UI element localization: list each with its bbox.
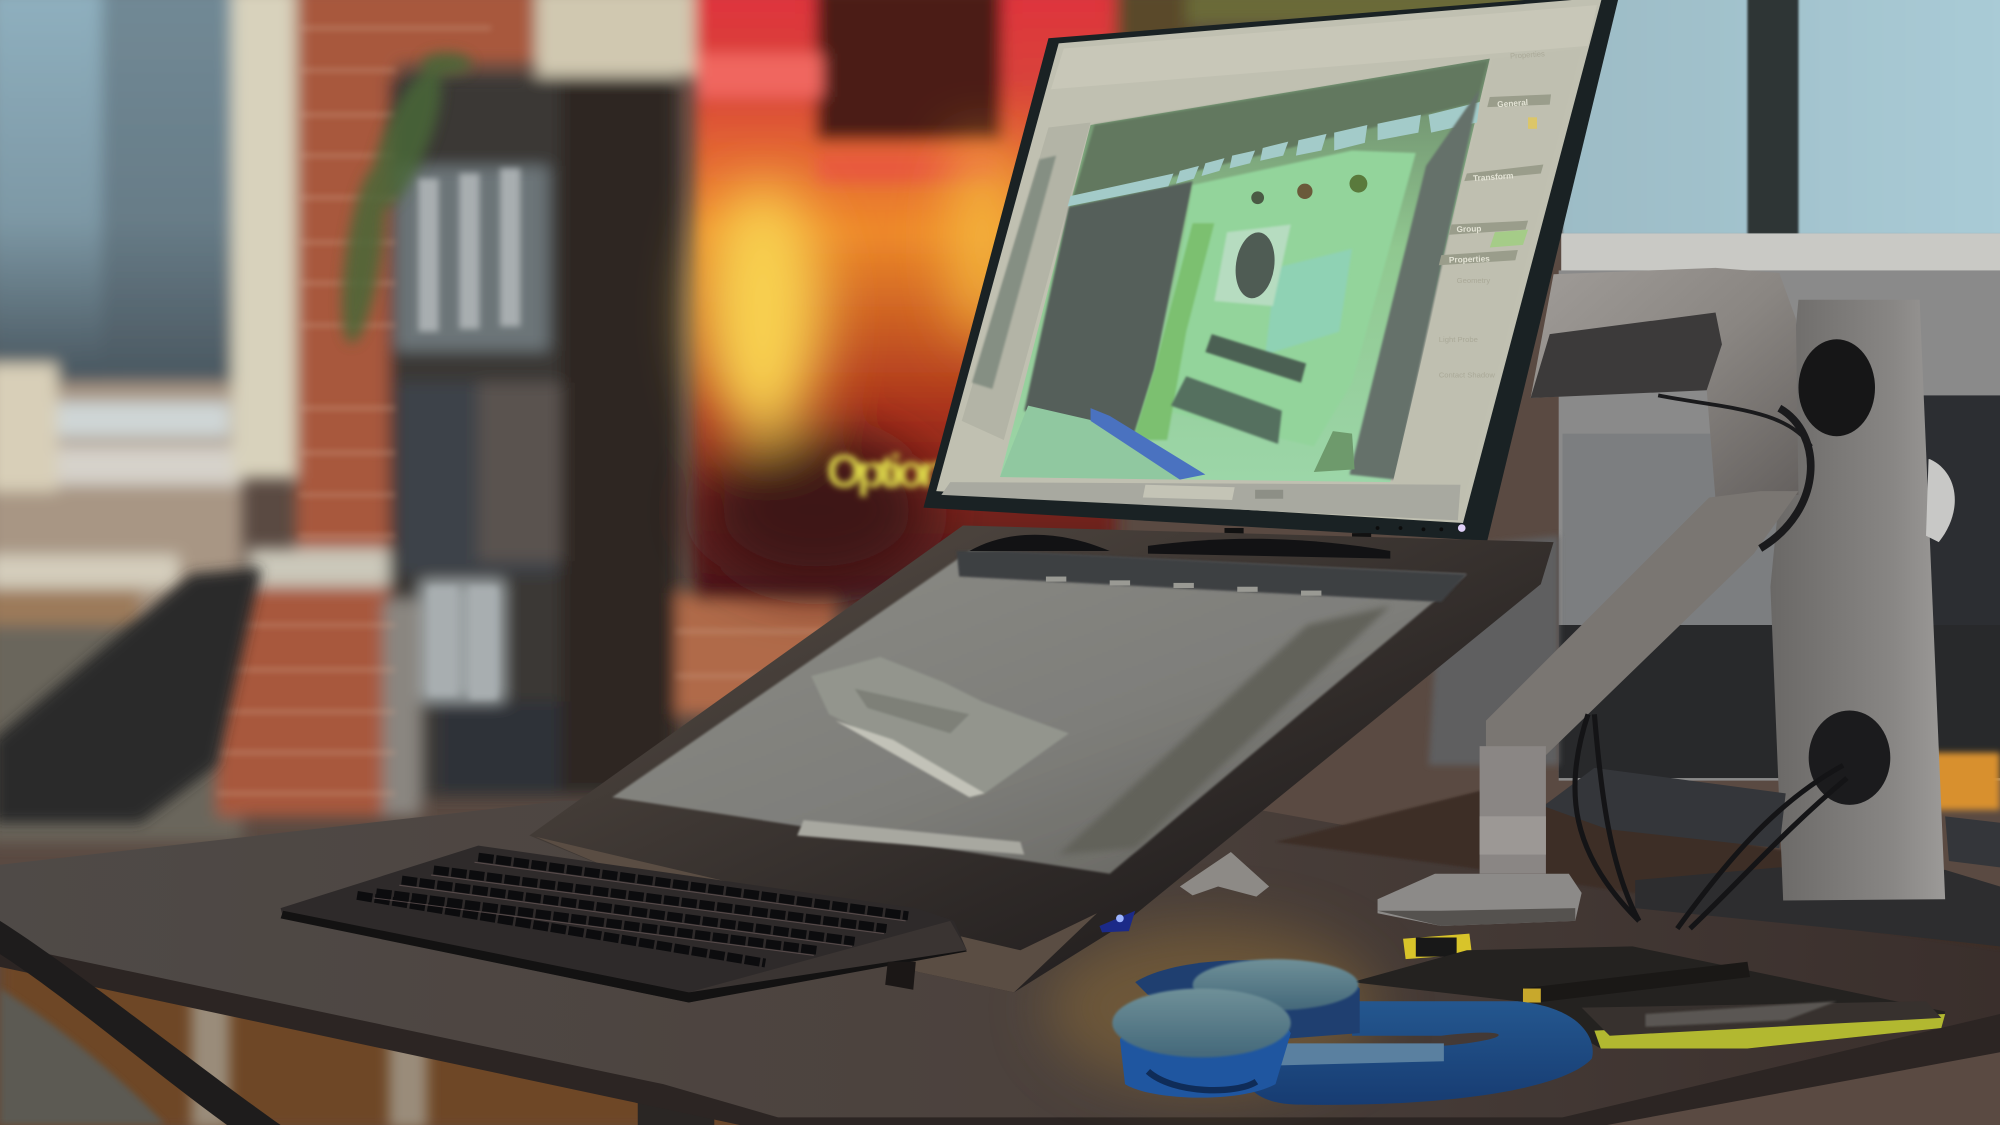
stand holes [1798, 339, 1875, 436]
front ear cup [1120, 1000, 1291, 1098]
viewport upper dark ceiling [1071, 61, 1487, 202]
panel labels: Group [1456, 223, 1482, 234]
items on desk [1352, 934, 1945, 1048]
window left [0, 0, 236, 408]
shelf [389, 77, 676, 797]
blurred yellow sign text: Option [827, 445, 948, 497]
monitor screen: app frame [936, 0, 1602, 523]
bottom status bar [941, 482, 1460, 520]
toolbar region [1051, 5, 1597, 89]
panel section bars [1487, 94, 1551, 107]
shelf binders [418, 168, 520, 699]
tablet screen [612, 551, 1467, 874]
panel labels: General [1497, 97, 1528, 109]
desk [0, 791, 2000, 1125]
stylus pen [1522, 962, 1750, 1004]
red wall [695, 0, 1116, 599]
column [232, 0, 296, 478]
properties panel: Geometry [1457, 276, 1490, 285]
panel labels [1449, 97, 1528, 265]
bricks [296, 0, 398, 548]
back monitor stand and cables [1635, 300, 2000, 946]
front monitor [923, 0, 1620, 541]
tablet lower lip [536, 837, 1097, 992]
keyboard [281, 846, 967, 1003]
tablet body [529, 526, 1554, 992]
ceiling light strip [1066, 102, 1480, 207]
blurred chair left [0, 568, 261, 823]
monitor bezel [923, 0, 1620, 541]
properties panel: Contact Shadow [1439, 371, 1495, 380]
headphones [1112, 959, 1593, 1105]
right window [1562, 0, 2000, 235]
3D viewport [1000, 59, 1490, 482]
keys [357, 857, 908, 963]
floor left [1000, 406, 1180, 480]
cables [1575, 714, 1639, 921]
headband [1244, 1001, 1593, 1105]
marker [1403, 934, 1472, 959]
rear ear cup [1135, 960, 1360, 1040]
left list panel [962, 122, 1091, 440]
viewport dark left wall [1024, 181, 1193, 440]
power light [1099, 911, 1135, 932]
reflected monitor base [969, 535, 1110, 551]
properties panel: Properties [1510, 49, 1545, 61]
blurred plant [333, 52, 472, 346]
tablet hinge foot [1180, 852, 1269, 897]
machine panel [1154, 151, 1416, 446]
properties panel: Light Probe [1439, 335, 1478, 344]
blue floor stripe [1091, 408, 1205, 480]
panel labels: Properties [1449, 253, 1490, 265]
monitor stand under screen [1224, 528, 1371, 551]
back keyboard [1543, 768, 2000, 867]
blurred floor and chair, lower left [0, 918, 765, 1125]
panel labels: Transform [1473, 170, 1514, 183]
tablet side panel [1059, 606, 1390, 855]
monitor arm [1378, 268, 1847, 929]
chair back, bottom left [0, 921, 281, 1125]
drawing tablet [1352, 946, 1945, 1048]
touchscreen tablet [529, 526, 1554, 992]
brick mortar lines [217, 28, 829, 793]
tablet top toolbar [957, 551, 1467, 602]
monitor button lights [1458, 524, 1466, 532]
blurred office desk on left [0, 383, 242, 625]
properties panel [1393, 48, 1582, 504]
tablet CAD model [811, 657, 1069, 797]
viewport right dark wall [1349, 89, 1480, 480]
back monitors [1429, 233, 2000, 810]
